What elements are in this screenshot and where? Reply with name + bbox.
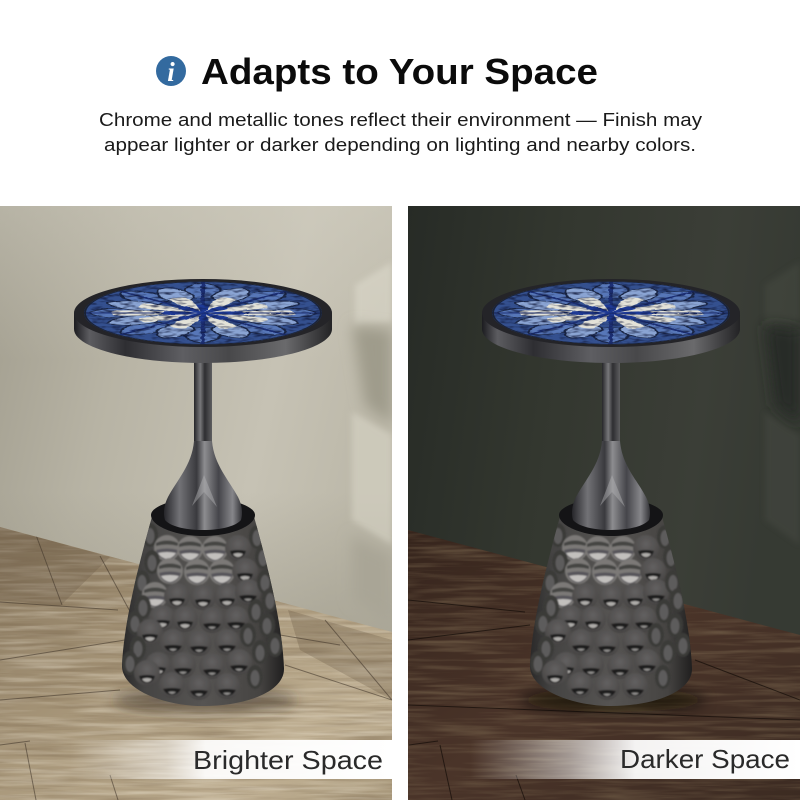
label: darker space: Darker Space bbox=[620, 744, 790, 774]
panel: brighter space bbox=[0, 206, 392, 800]
description text: appear lighter or darker depending on lighting and nearby colors. bbox=[104, 135, 696, 155]
label: brighter space bbox=[70, 740, 392, 779]
floor bbox=[0, 520, 392, 800]
description text bbox=[99, 110, 702, 155]
table shadow on floor bbox=[521, 688, 705, 712]
icon: info: i bbox=[167, 57, 175, 87]
wall bbox=[0, 206, 392, 646]
table shadow on floor bbox=[113, 688, 297, 712]
table: brighter space bbox=[74, 279, 332, 706]
wall bbox=[408, 206, 800, 646]
floor bbox=[408, 520, 800, 800]
description text: Chrome and metallic tones reflect their environment — Finish may bbox=[99, 110, 702, 130]
header bbox=[99, 51, 702, 155]
window light and shadow on wall bbox=[765, 262, 800, 545]
title: Adapts to Your Space bbox=[201, 51, 598, 92]
window light and shadow on wall bbox=[352, 262, 392, 625]
icon: info bbox=[156, 56, 186, 87]
label: darker space bbox=[470, 740, 800, 779]
label: brighter space: Brighter Space bbox=[193, 745, 383, 775]
table: darker space bbox=[482, 279, 740, 706]
panel: darker space bbox=[408, 206, 800, 800]
